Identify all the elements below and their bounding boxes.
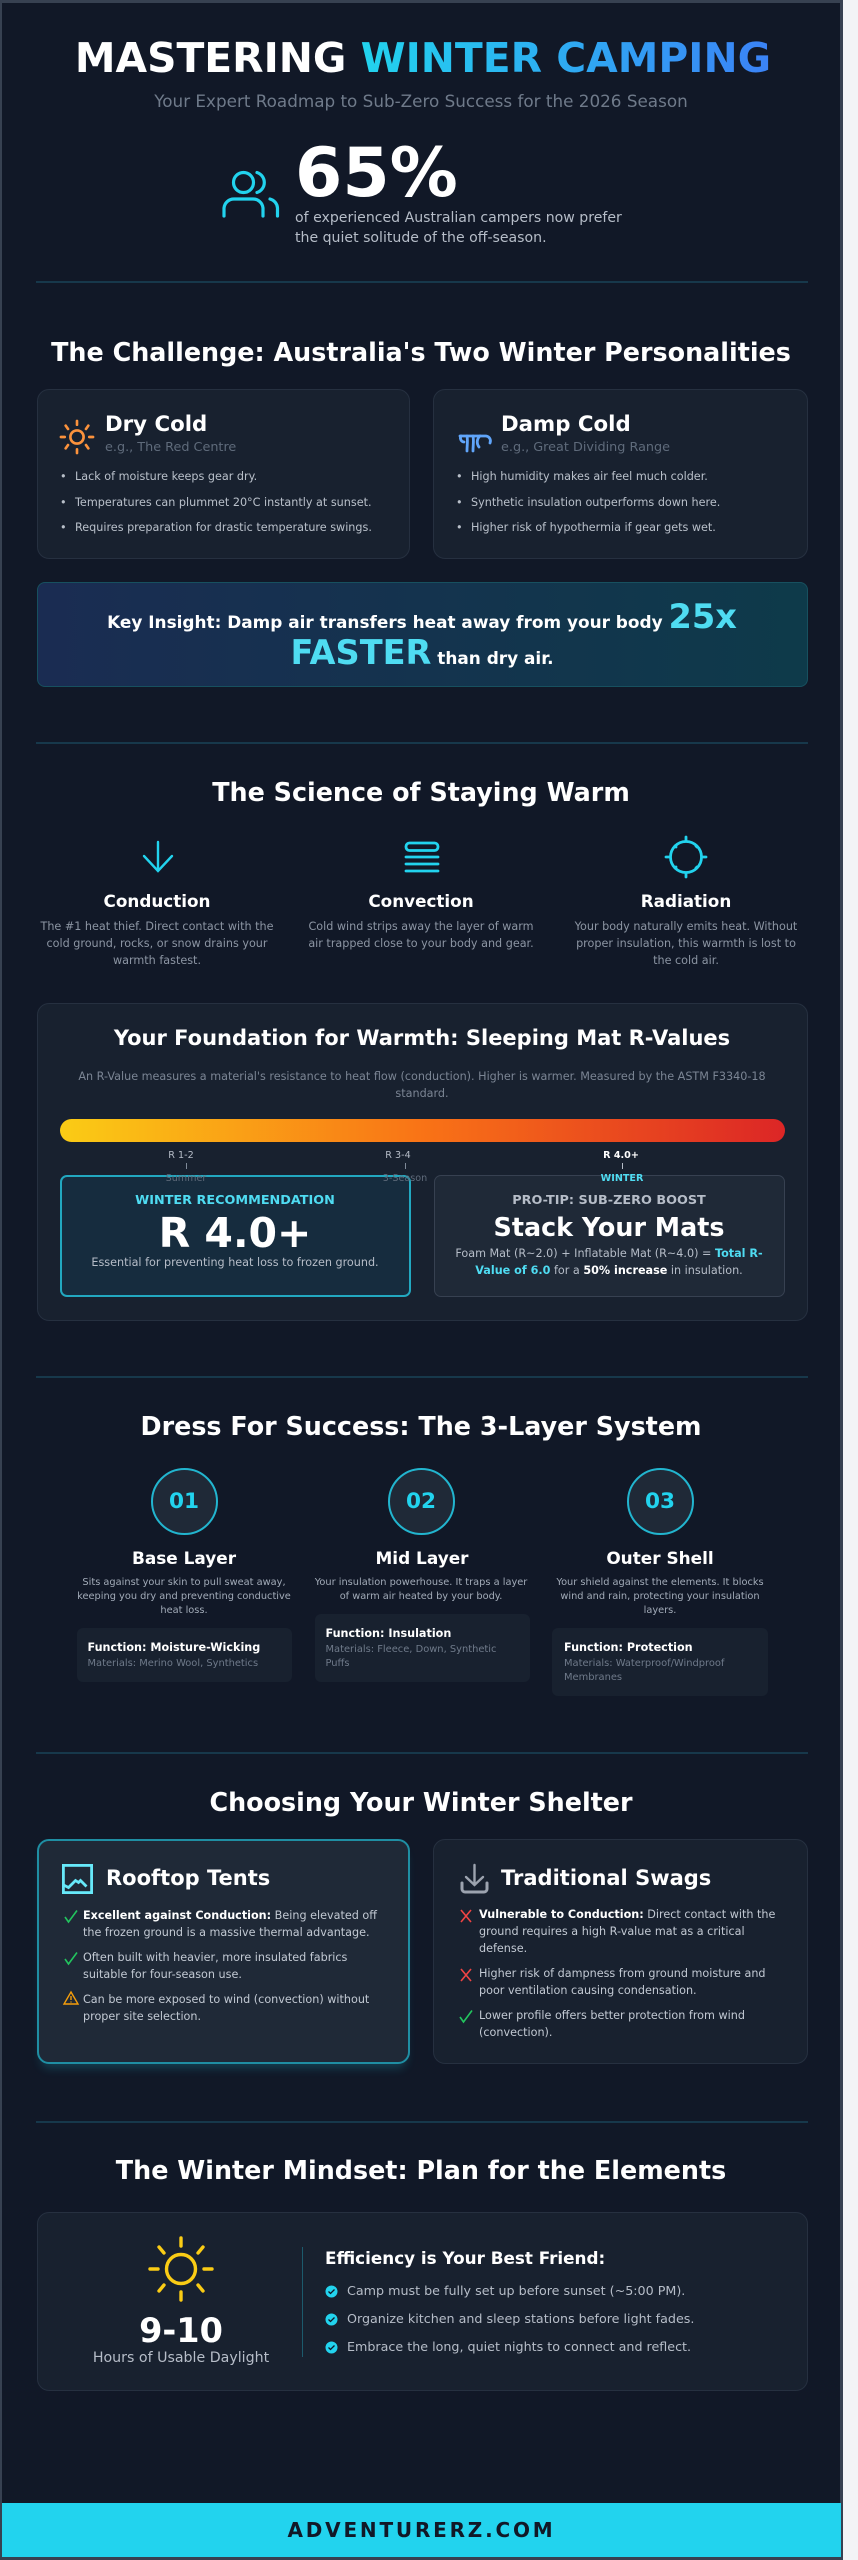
icon: check [64,1952,78,1966]
number badge 01: 01 [169,1489,199,1514]
footer [2,2503,841,2557]
swag pros and cons: ground requires a high R-value mat as a critical [479,1925,745,1938]
base layer text [77,1577,291,1616]
mid layer function: Function: Insulation [326,1627,451,1640]
radiation text: the cold air. [653,954,719,967]
icon: tent [62,1864,93,1894]
icon: arrow down [142,840,174,873]
stat caption: of experienced Australian campers now prefer [295,210,622,226]
outer shell text [556,1577,764,1616]
r-value heading: Your Foundation for Warmth: Sleeping Mat R-Values [114,1026,730,1050]
r-value description: standard. [395,1087,449,1100]
icon: daylight sun [148,2236,214,2302]
outer shell title: Outer Shell [606,1548,714,1568]
number badge 03: 03 [645,1489,675,1514]
damp cold bullets: Synthetic insulation outperforms down here. [471,496,720,509]
swag pros and cons: Lower profile offers better protection from wind [479,2009,745,2022]
box: winter recommendation: Essential for preventing heat loss to frozen ground. [91,1256,379,1269]
subtitle: Your Expert Roadmap to Sub-Zero Success for the 2026 Season [154,91,688,111]
swag pros and cons: Higher risk of dampness from ground moisture and [479,1967,766,1980]
damp cold bullets: • [456,521,463,534]
title: MASTERING WINTER CAMPING [75,34,771,82]
box: pro tip: Stack Your Mats [494,1212,724,1242]
scale: R 1-2: R 1-2 [168,1150,194,1161]
rooftop pros and cons: Can be more exposed to wind (convection) without [83,1993,369,2006]
mid layer function [314,1614,530,1682]
icon: sun [60,420,94,454]
panel: radiation [574,836,797,967]
icon: warning [62,1990,80,2005]
icon: check [64,1910,78,1924]
icon: damp [458,434,492,452]
outer shell text: Your shield against the elements. It blocks [556,1577,764,1588]
conduction text: cold ground, rocks, or snow drains your [46,937,268,950]
base layer function: Materials: Merino Wool, Synthetics [88,1658,258,1669]
outer shell text: layers. [644,1605,676,1616]
icon: cross [460,1968,472,1982]
box: winter recommendation [60,1175,411,1297]
icon: tick [326,2286,338,2298]
mid layer title: Mid Layer [375,1548,469,1568]
number badge 01 [150,1468,218,1535]
panel: base layer [77,1468,292,1682]
efficiency list: Organize kitchen and sleep stations before light fades. [347,2311,694,2326]
base layer function: Function: Moisture-Wicking [88,1641,260,1654]
scale: R 4.0+ [600,1150,644,1184]
divider [302,2247,303,2357]
dry cold title: Dry Cold [105,412,207,437]
efficiency list: Embrace the long, quiet nights to connect and reflect. [347,2339,691,2354]
panel: traditional swags [433,1839,808,2064]
footer: ADVENTURERZ.COM [288,2518,556,2542]
radiation text: proper insulation, this warmth is lost to [576,937,796,950]
radiation text [574,920,797,967]
daylight stat: 9-10 [139,2311,223,2350]
icon: cross [460,1910,472,1922]
damp cold bullets [456,470,720,534]
number badge 02: 02 [406,1489,436,1514]
conduction text [40,920,274,967]
panel: conduction [40,840,274,967]
icon: check [459,2010,472,2024]
base layer title: Base Layer [132,1548,236,1568]
base layer text: keeping you dry and preventing conductive [77,1591,291,1602]
convection title: Convection [368,891,474,911]
panel: mid layer [314,1468,530,1682]
r-value description: An R-Value measures a material's resistance to heat flow (conduction). Higher is warmer. Measured by the ASTM F3340-18 [78,1070,766,1083]
callout: key insight: Key Insight: Damp air transfers heat away from your body 25x [107,597,737,636]
rooftop pros and cons: Often built with heavier, more insulated fabrics [83,1951,347,1964]
damp cold bullets: High humidity makes air feel much colder. [471,470,708,483]
dry cold bullets: • [60,521,67,534]
r-value description [78,1070,766,1100]
daylight caption: Hours of Usable Daylight [93,2350,269,2366]
convection text: Cold wind strips away the layer of warm [308,920,534,933]
callout: key insight [37,582,808,687]
dry cold bullets: Temperatures can plummet 20°C instantly at sunset. [75,496,372,509]
radiation text: Your body naturally emits heat. Without [575,920,797,933]
heading: shelter: Choosing Your Winter Shelter [209,1787,633,1817]
efficiency list: Efficiency is Your Best Friend: [325,2248,605,2268]
box: pro tip [434,1175,785,1297]
panel: convection [308,842,534,950]
scale: R 4.0+: R 4.0+ [603,1150,639,1161]
damp cold bullets: Higher risk of hypothermia if gear gets wet. [471,521,716,534]
damp cold subtitle: e.g., Great Dividing Range [501,440,670,455]
mid layer function: Materials: Fleece, Down, Synthetic [326,1644,496,1655]
panel: rooftop tents [37,1839,410,2064]
damp cold bullets: • [456,470,463,483]
icon: download [460,1864,488,1894]
convection text [308,920,534,950]
panel: outer shell [552,1468,768,1696]
heading: challenge: The Challenge: Australia's Two Winter Personalities [51,337,791,367]
outer shell function: Materials: Waterproof/Windproof [564,1658,724,1669]
mid layer text: Your insulation powerhouse. It traps a layer [315,1577,527,1588]
icon: tick [325,2341,338,2354]
box: pro tip: Value of 6.0 for a 50% increase in insulation. [475,1264,743,1277]
dry cold bullets: Lack of moisture keeps gear dry. [75,470,257,483]
rooftop pros and cons: Excellent against Conduction: Being elevated off [83,1909,377,1922]
damp cold bullets: • [456,496,463,509]
mid layer text [314,1577,528,1602]
efficiency list [325,2248,694,2354]
panel: dry cold [37,389,410,559]
icon: people [222,170,280,218]
swag pros and cons: defense. [479,1942,527,1955]
scale: R 4.0+: WINTER [601,1173,643,1184]
rooftop pros and cons [62,1909,378,2023]
efficiency list: Camp must be fully set up before sunset (~5:00 PM). [347,2283,685,2298]
scale: R 3-4: 3-Season [383,1173,427,1184]
big stat: 65% [295,134,458,213]
base layer function [76,1628,292,1682]
conduction title: Conduction [104,891,210,911]
panel: sleeping mat r-values [37,1003,808,1321]
outer shell function [552,1628,768,1696]
heading: layers: Dress For Success: The 3-Layer System [140,1411,702,1441]
scale: R 3-4 [383,1150,427,1184]
base layer text: Sits against your skin to pull sweat away, [82,1577,286,1588]
scale: R 3-4: R 3-4 [385,1150,411,1161]
traditional swags title: Traditional Swags [501,1866,711,1890]
dry cold bullets: • [60,496,67,509]
rooftop pros and cons: suitable for four-season use. [83,1968,242,1981]
conduction text: The #1 heat thief. Direct contact with the [40,920,274,933]
scale: R 1-2: Summer [166,1173,206,1184]
radiation title: Radiation [641,891,731,911]
number badge 02 [388,1468,454,1535]
swag pros and cons: poor ventilation causing condensation. [479,1984,697,1997]
swag pros and cons: Vulnerable to Conduction: Direct contact with the [479,1908,775,1921]
box: pro tip: Foam Mat (R~2.0) + Inflatable Mat (R~4.0) = Total R- [455,1247,763,1260]
rooftop pros and cons: the frozen ground is a massive thermal advantage. [83,1926,370,1939]
dry cold subtitle: e.g., The Red Centre [105,440,236,455]
outer shell text: wind and rain, protecting your insulation [560,1591,760,1602]
panel: mindset [37,2212,808,2391]
r-value gradient bar [60,1119,785,1142]
dry cold bullets: • [60,470,67,483]
box: pro tip: PRO-TIP: SUB-ZERO BOOST [512,1193,706,1208]
box: winter recommendation: R 4.0+ [159,1209,311,1257]
dry cold bullets [60,470,372,534]
outer shell function: Membranes [564,1672,622,1683]
mid layer function: Puffs [326,1658,350,1669]
heading: mindset: The Winter Mindset: Plan for the Elements [116,2155,726,2185]
icon: tick [326,2314,338,2326]
dry cold bullets: Requires preparation for drastic temperature swings. [75,521,372,534]
callout: key insight: FASTER than dry air. [290,633,554,672]
damp cold title: Damp Cold [501,412,631,437]
rooftop pros and cons: proper site selection. [83,2010,201,2023]
stat caption: the quiet solitude of the off-season. [295,230,547,246]
conduction text: warmth fastest. [113,954,201,967]
icon: layers [404,842,440,872]
base layer text: heat loss. [160,1605,208,1616]
number badge 03 [626,1468,694,1535]
icon: radiation [664,836,708,878]
convection text: air trapped close to your body and gear. [308,937,534,950]
scale: R 1-2 [166,1150,206,1184]
mid layer text: of warm air heated by your body. [340,1591,502,1602]
stat caption [295,210,622,246]
swag pros and cons [459,1908,775,2039]
heading: science: The Science of Staying Warm [212,777,630,807]
panel: damp cold [433,389,808,559]
box: winter recommendation: WINTER RECOMMENDATION [135,1193,335,1208]
rooftop tents title: Rooftop Tents [106,1866,270,1890]
outer shell function: Function: Protection [564,1641,693,1654]
swag pros and cons: (convection). [479,2026,552,2039]
